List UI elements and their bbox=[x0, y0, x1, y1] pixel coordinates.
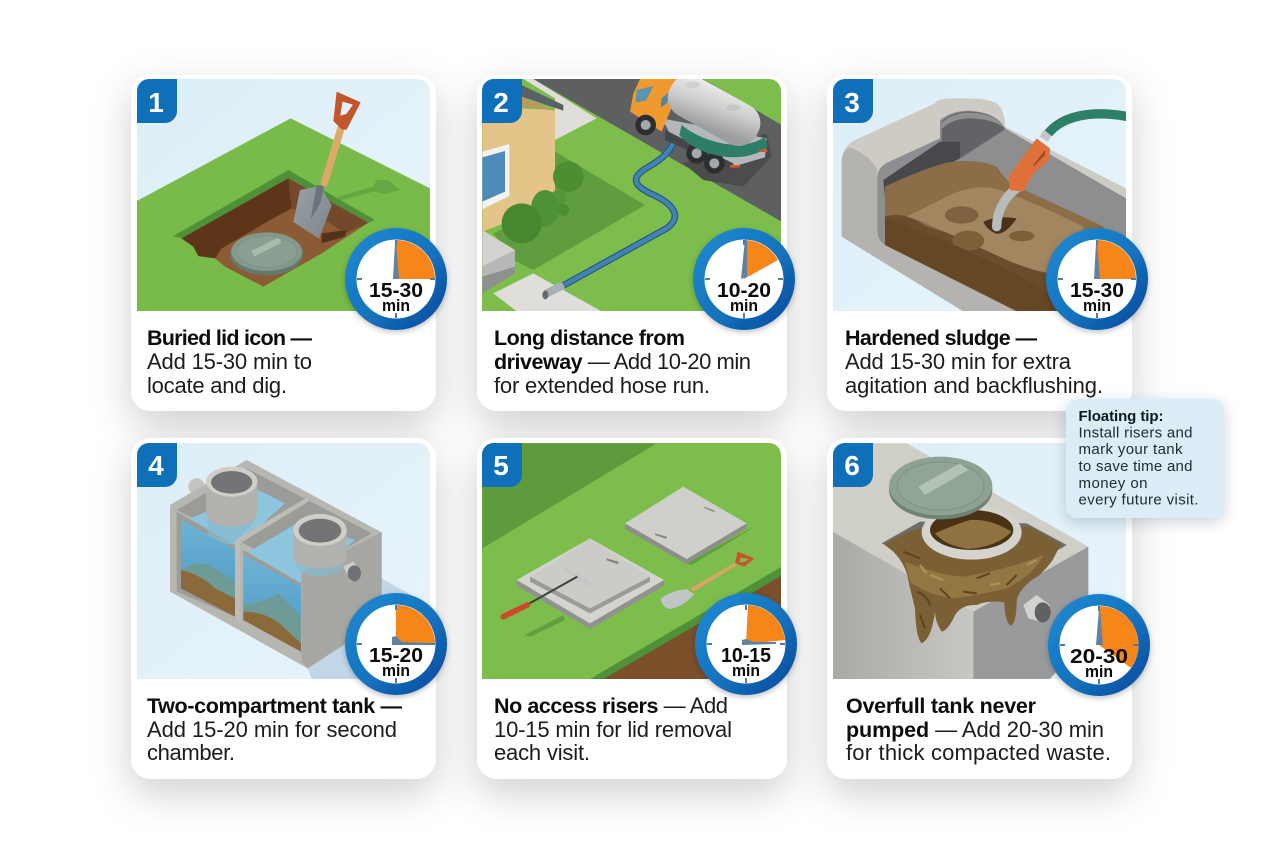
badge 6 bbox=[833, 443, 873, 487]
timer 15-20 min bbox=[345, 593, 447, 695]
caption 1: locate and dig. bbox=[147, 373, 287, 398]
illustration: lid in dug hole with shovel bbox=[137, 79, 430, 311]
caption 3 bbox=[845, 326, 1103, 398]
floating tip callout: to save time and bbox=[1078, 458, 1192, 475]
badge 1: 1 bbox=[148, 87, 164, 118]
floating tip callout bbox=[1066, 399, 1224, 518]
timer 15-30 min bbox=[1046, 228, 1148, 330]
badge 4: 4 bbox=[148, 450, 164, 481]
card 2: long distance from driveway bbox=[477, 68, 795, 411]
timer 20-30 min: min bbox=[1085, 662, 1113, 681]
badge 6: 6 bbox=[844, 450, 860, 481]
illustration: cutaway two-chamber tank bbox=[137, 443, 430, 679]
timer 15-30 min: 15-30 bbox=[369, 280, 423, 302]
floating tip callout: Floating tip: bbox=[1078, 408, 1164, 425]
card 6 background bbox=[827, 438, 1132, 779]
caption 2: for extended hose run. bbox=[494, 373, 710, 398]
illustration: overflowing tank with open lid bbox=[833, 443, 1126, 679]
card 2 background bbox=[477, 75, 787, 411]
timer 10-20 min bbox=[693, 228, 795, 330]
timer 20-30 min bbox=[1048, 594, 1150, 696]
caption 3: Hardened sludge — bbox=[845, 326, 1038, 350]
caption 4 bbox=[147, 694, 402, 765]
timer 15-30 min: 15-30 bbox=[1070, 280, 1124, 302]
illustration: concrete lids on lawn bbox=[482, 443, 782, 679]
timer 15-30 min bbox=[345, 228, 447, 330]
badge 3: 3 bbox=[844, 87, 860, 118]
floating tip callout: money on bbox=[1078, 475, 1148, 492]
caption 4: chamber. bbox=[147, 740, 235, 765]
timer 20-30 min: 20-30 bbox=[1070, 646, 1128, 668]
caption 1 bbox=[147, 326, 312, 398]
caption 6: for thick compacted waste. bbox=[846, 740, 1111, 765]
caption 1: Add 15-30 min to bbox=[147, 349, 312, 374]
card 6: overfull tank bbox=[827, 438, 1150, 779]
badge 1 bbox=[137, 79, 177, 123]
caption 5: 10-15 min for lid removal bbox=[494, 717, 732, 742]
caption 3: Add 15-30 min for extra bbox=[845, 349, 1072, 374]
caption 4: Add 15-20 min for second bbox=[147, 717, 397, 742]
timer 10-20 min: min bbox=[730, 296, 758, 315]
caption 6 bbox=[846, 694, 1111, 765]
timer 15-30 min: min bbox=[1083, 296, 1111, 315]
badge 4 bbox=[137, 443, 177, 487]
card 1: buried lid bbox=[131, 75, 447, 411]
caption 6: Overfull tank never bbox=[846, 694, 1037, 718]
card 3 background bbox=[827, 75, 1132, 411]
caption 2: Long distance from bbox=[494, 326, 685, 350]
card 5: no access risers bbox=[477, 438, 797, 779]
caption 2 bbox=[494, 326, 751, 398]
floating tip callout: Install risers and bbox=[1078, 424, 1192, 442]
caption 4: Two-compartment tank — bbox=[147, 694, 402, 718]
caption 5: each visit. bbox=[494, 740, 590, 765]
timer 10-20 min: 10-20 bbox=[717, 280, 771, 302]
card 3: hardened sludge bbox=[827, 75, 1148, 411]
timer 15-20 min: 15-20 bbox=[369, 645, 423, 667]
badge 3 bbox=[833, 79, 873, 123]
timer 10-15 min: 10-15 bbox=[721, 645, 771, 667]
badge 2: 2 bbox=[493, 87, 509, 118]
floating tip callout: mark your tank bbox=[1078, 441, 1183, 458]
floating tip callout: every future visit. bbox=[1078, 492, 1198, 508]
caption 2: driveway — Add 10-20 min bbox=[494, 349, 751, 374]
illustration: sludge in tank with nozzle bbox=[833, 79, 1128, 311]
caption 5: No access risers — Add bbox=[494, 693, 728, 718]
badge 5: 5 bbox=[493, 450, 509, 481]
illustration: truck and long hose run bbox=[482, 68, 782, 311]
card 1 background bbox=[131, 75, 436, 411]
caption 6: pumped — Add 20-30 min bbox=[846, 717, 1104, 742]
timer 15-20 min: min bbox=[382, 661, 410, 680]
card 5 background bbox=[477, 438, 787, 779]
timer 15-30 min: min bbox=[382, 296, 410, 315]
caption 1: Buried lid icon — bbox=[147, 326, 312, 350]
badge 5 bbox=[482, 443, 522, 487]
card 4 background bbox=[131, 438, 436, 779]
caption 5 bbox=[494, 693, 732, 765]
badge 2 bbox=[482, 79, 522, 123]
timer 10-15 min bbox=[695, 593, 797, 695]
timer 10-15 min: min bbox=[732, 661, 760, 680]
caption 3: agitation and backflushing. bbox=[845, 373, 1103, 398]
card 4: two-compartment tank bbox=[131, 438, 447, 779]
